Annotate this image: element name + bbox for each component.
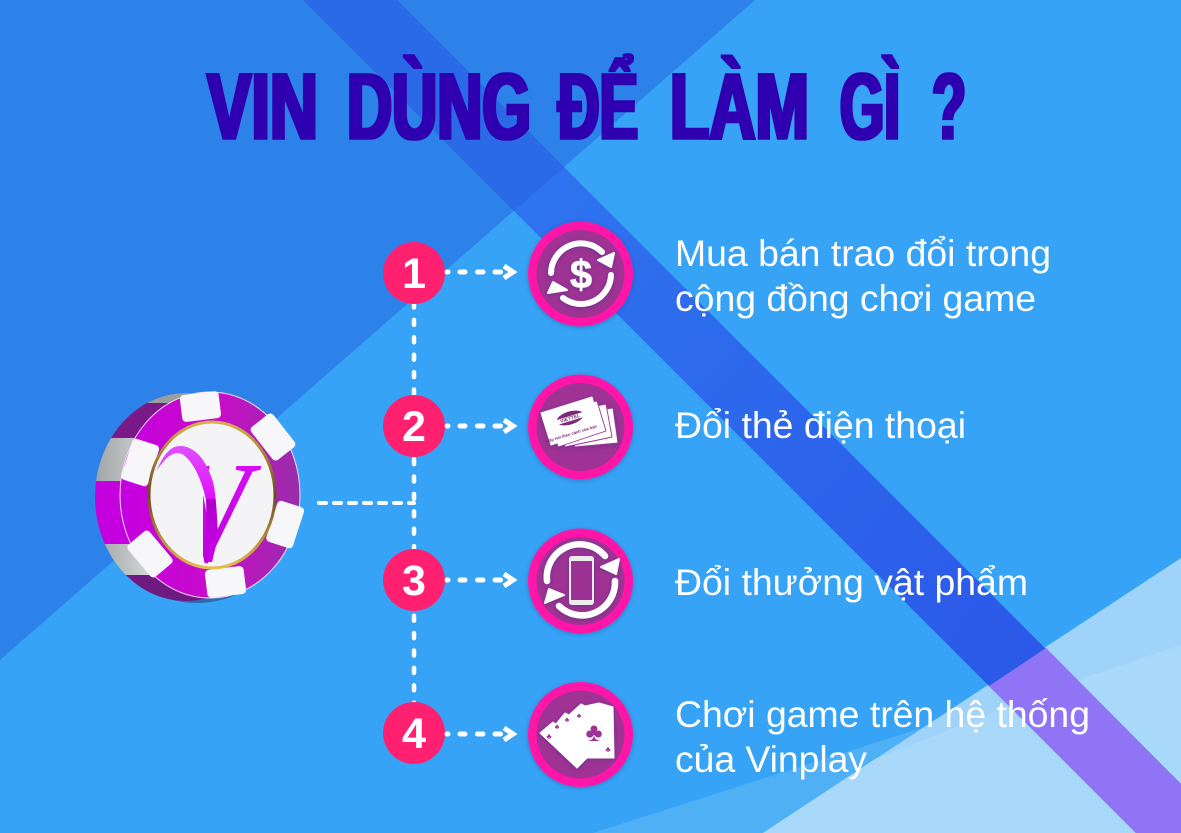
casino chip logo [90, 390, 305, 605]
title: ? [932, 54, 966, 160]
arrow 1 [447, 266, 513, 278]
number badge 1: 1 [402, 250, 426, 298]
icon: money exchange [528, 222, 633, 326]
number badge 4 [383, 702, 445, 764]
icon: playing cards [528, 682, 633, 787]
arrow 4 [447, 728, 513, 740]
icon: playing cards: ♣ [546, 732, 552, 741]
text 4: của Vinplay [675, 738, 867, 780]
icon: phone cards [528, 374, 633, 480]
arrow 3 [447, 574, 513, 586]
icon: phone cards: Hãy nói theo cách của bạn [546, 423, 598, 444]
letter V [157, 446, 262, 564]
gold ring [148, 420, 276, 570]
chip side [95, 393, 207, 601]
chip notches [120, 391, 305, 598]
chip face [120, 392, 300, 598]
step 1 [383, 222, 1051, 326]
number badge 1 [383, 242, 445, 304]
text 1: cộng đồng chơi game [675, 277, 1036, 319]
text 1 [675, 232, 1051, 319]
title [207, 54, 966, 160]
number badge 4: 4 [402, 710, 426, 758]
title: VIN [207, 54, 318, 160]
step 2 [383, 374, 966, 480]
title: LÀM [670, 54, 809, 160]
letter V: V [172, 433, 262, 593]
icon: playing cards: ♣ [585, 717, 603, 747]
text 4: Chơi game trên hệ thống [675, 693, 1090, 735]
icon: money exchange: $ [570, 253, 592, 297]
text 1: Mua bán trao đổi trong [675, 232, 1051, 274]
icon: playing cards: ♣ [565, 717, 570, 724]
text 2: Đổi thẻ điện thoại [675, 404, 966, 446]
icon: phone cards: VIETTEL [560, 413, 581, 425]
icon: playing cards: ♣ [555, 724, 560, 731]
title: ĐỂ [558, 54, 638, 160]
number badge 2: 2 [402, 403, 426, 451]
arrow 2 [447, 420, 513, 432]
text 4 [675, 693, 1090, 780]
number badge 2 [383, 395, 445, 457]
text 3: Đổi thưởng vật phẩm [675, 561, 1028, 603]
icon: phone exchange [528, 528, 633, 634]
title: GÌ [840, 54, 900, 160]
number badge 3: 3 [402, 557, 426, 605]
step 4 [383, 682, 1090, 787]
icon: playing cards: ♣ [577, 713, 582, 720]
number badge 3 [383, 549, 445, 611]
chip shadow [97, 395, 297, 603]
icon: playing cards: ♣ [605, 745, 611, 754]
step 3 [383, 528, 1028, 634]
chip to timeline connector [319, 501, 414, 505]
vertical dashed connector [412, 302, 416, 704]
title: DÙNG [347, 54, 531, 160]
white centre [150, 424, 274, 566]
